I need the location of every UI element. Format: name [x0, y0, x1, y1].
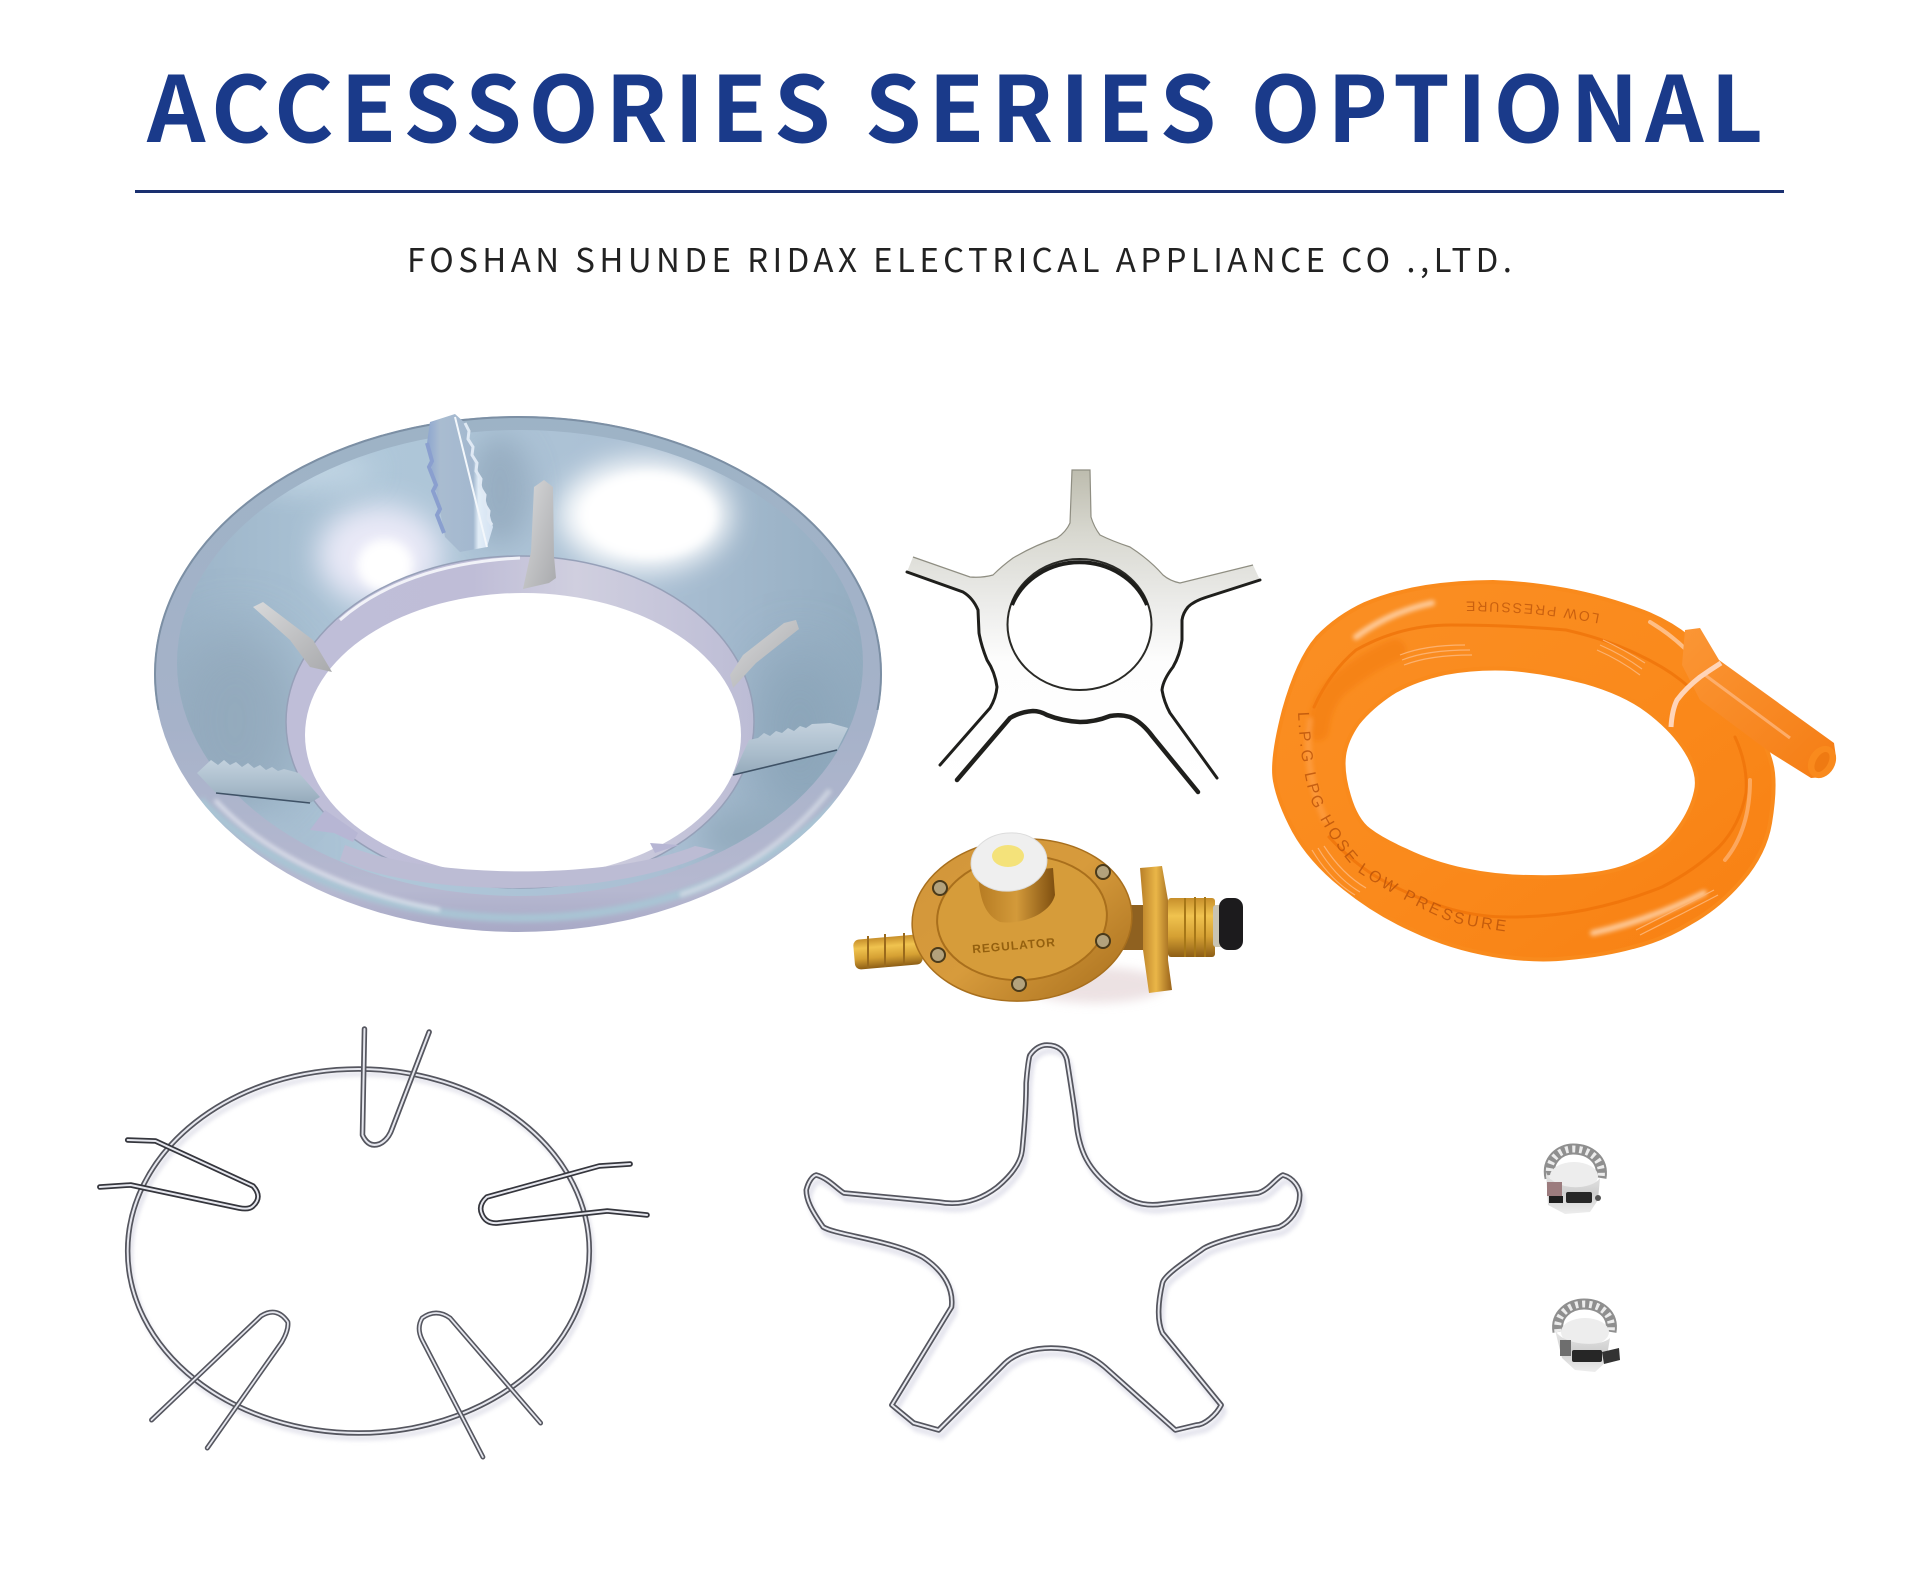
hose: coil — [1274, 582, 1774, 959]
star: hole edge — [1008, 559, 1152, 690]
product: orange LPG hose coil — [1272, 580, 1836, 962]
round support: ring — [128, 1069, 589, 1433]
product: brass gas regulator — [853, 829, 1243, 1008]
bowl: left thin tab — [253, 602, 332, 672]
bowl: inner collar — [286, 556, 754, 888]
regulator: stem — [978, 868, 1055, 923]
product: chrome round pot support — [100, 1029, 647, 1457]
round support: lower-right tab — [419, 1313, 541, 1457]
product: upper hose clamp — [1546, 1149, 1601, 1214]
bowl: top serrated tab — [427, 414, 493, 552]
bowl: bottom small tabs — [310, 810, 679, 853]
product: wok support bowl — [154, 414, 882, 932]
regulator: stamped marking: REGULATOR — [972, 935, 1056, 956]
star: dark lower edges — [907, 572, 1260, 792]
hose: free end — [1682, 628, 1842, 783]
hose: cable tie — [1671, 663, 1721, 727]
bowl: left serrated tab — [197, 760, 320, 803]
product: lower hose clamp — [1555, 1304, 1620, 1372]
regulator: outlet and hand wheel — [1120, 866, 1243, 993]
round support: left tab — [100, 1140, 258, 1209]
regulator: shadow — [1025, 967, 1165, 1003]
bowl: right thin tab — [730, 620, 799, 688]
bowl: top thin tab — [523, 480, 556, 589]
hose: printed marking lower: L.P.G LPG HOSE LOW PRESSURE — [1298, 712, 1506, 932]
regulator: raised centre — [933, 850, 1111, 986]
regulator: screws — [931, 865, 1110, 991]
regulator: white cap — [968, 829, 1050, 895]
infographic canvas — [97, 74, 1836, 1460]
product: chrome star pot support — [806, 1045, 1303, 1436]
title divider — [135, 190, 1784, 193]
round support: right tab — [481, 1164, 647, 1223]
hose: strand contours — [1308, 603, 1750, 933]
round support: lower-left tab — [152, 1312, 288, 1448]
round support: top tab — [362, 1029, 429, 1145]
regulator: body disc — [907, 832, 1137, 1008]
bowl: right serrated tab — [733, 723, 848, 775]
company subtitle: FOSHAN SHUNDE RIDAX ELECTRICAL APPLIANCE CO .,LTD. — [407, 234, 1512, 282]
hose: rib textures — [1312, 640, 1718, 935]
regulator: hose barb — [853, 933, 923, 970]
title: ACCESSORIES SERIES OPTIONAL — [146, 37, 1763, 169]
product: flat steel star support — [907, 470, 1260, 792]
hose: printed marking upper: LOW PRESSURE — [1466, 602, 1599, 624]
